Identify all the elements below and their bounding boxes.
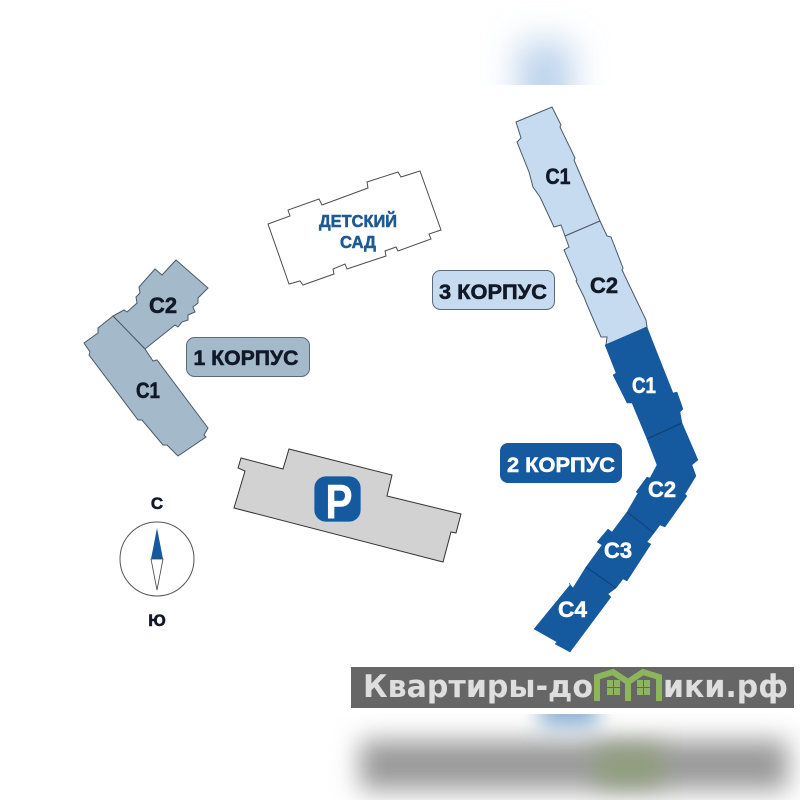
- parking building: [234, 449, 461, 562]
- section C1 of building 3: С1: [546, 164, 570, 189]
- section C1 of building 1: [84, 316, 208, 456]
- kindergarten building: ДЕТСКИЙ: [319, 210, 397, 231]
- label: building 3: 3 КОРПУС: [439, 280, 547, 304]
- compass north label: С: [151, 494, 163, 513]
- section C2 of building 2: [627, 423, 698, 533]
- section C4 of building 2: С4: [558, 597, 588, 622]
- section C1 of building 3: [516, 107, 600, 236]
- section dividers: [586, 423, 682, 588]
- watermark banner: ики.рф: [663, 669, 788, 705]
- label: building 3: [432, 270, 554, 310]
- section C2 of building 1: [113, 260, 208, 349]
- section C1 of building 2: [605, 327, 683, 439]
- compass: [120, 494, 194, 630]
- compass south label: Ю: [148, 611, 166, 630]
- label: building 1: 1 КОРПУС: [194, 346, 298, 370]
- watermark banner: [351, 667, 794, 708]
- kindergarten building: САД: [340, 232, 376, 252]
- section C1 of building 1: С1: [136, 378, 160, 403]
- building 1: [84, 260, 208, 456]
- icon: compass needle: [151, 528, 163, 590]
- section C3 of building 2: С3: [604, 538, 632, 563]
- building 3: [516, 107, 647, 345]
- section C1 of building 2: С1: [632, 373, 656, 398]
- icon: parking sign: [314, 476, 361, 529]
- kindergarten building: [268, 171, 441, 285]
- blurred top edge: blue blob: [518, 42, 572, 122]
- section C2 of building 2: С2: [648, 477, 676, 502]
- label: building 2: [500, 443, 622, 483]
- section C3 of building 2: [586, 512, 654, 588]
- building 2: [534, 327, 698, 652]
- section C2 of building 1: С2: [149, 293, 177, 318]
- section C2 of building 3: [564, 221, 647, 345]
- label: building 1: [186, 338, 310, 376]
- watermark banner: Квартиры-до: [363, 669, 593, 705]
- icon: parking sign: P: [326, 476, 352, 529]
- label: building 2: 2 КОРПУС: [507, 453, 615, 477]
- section C4 of building 2: [534, 567, 616, 652]
- icon: green houses: [597, 672, 659, 701]
- blurred bottom edge: watermark reflection: [360, 695, 788, 790]
- section C2 of building 3: С2: [590, 273, 618, 298]
